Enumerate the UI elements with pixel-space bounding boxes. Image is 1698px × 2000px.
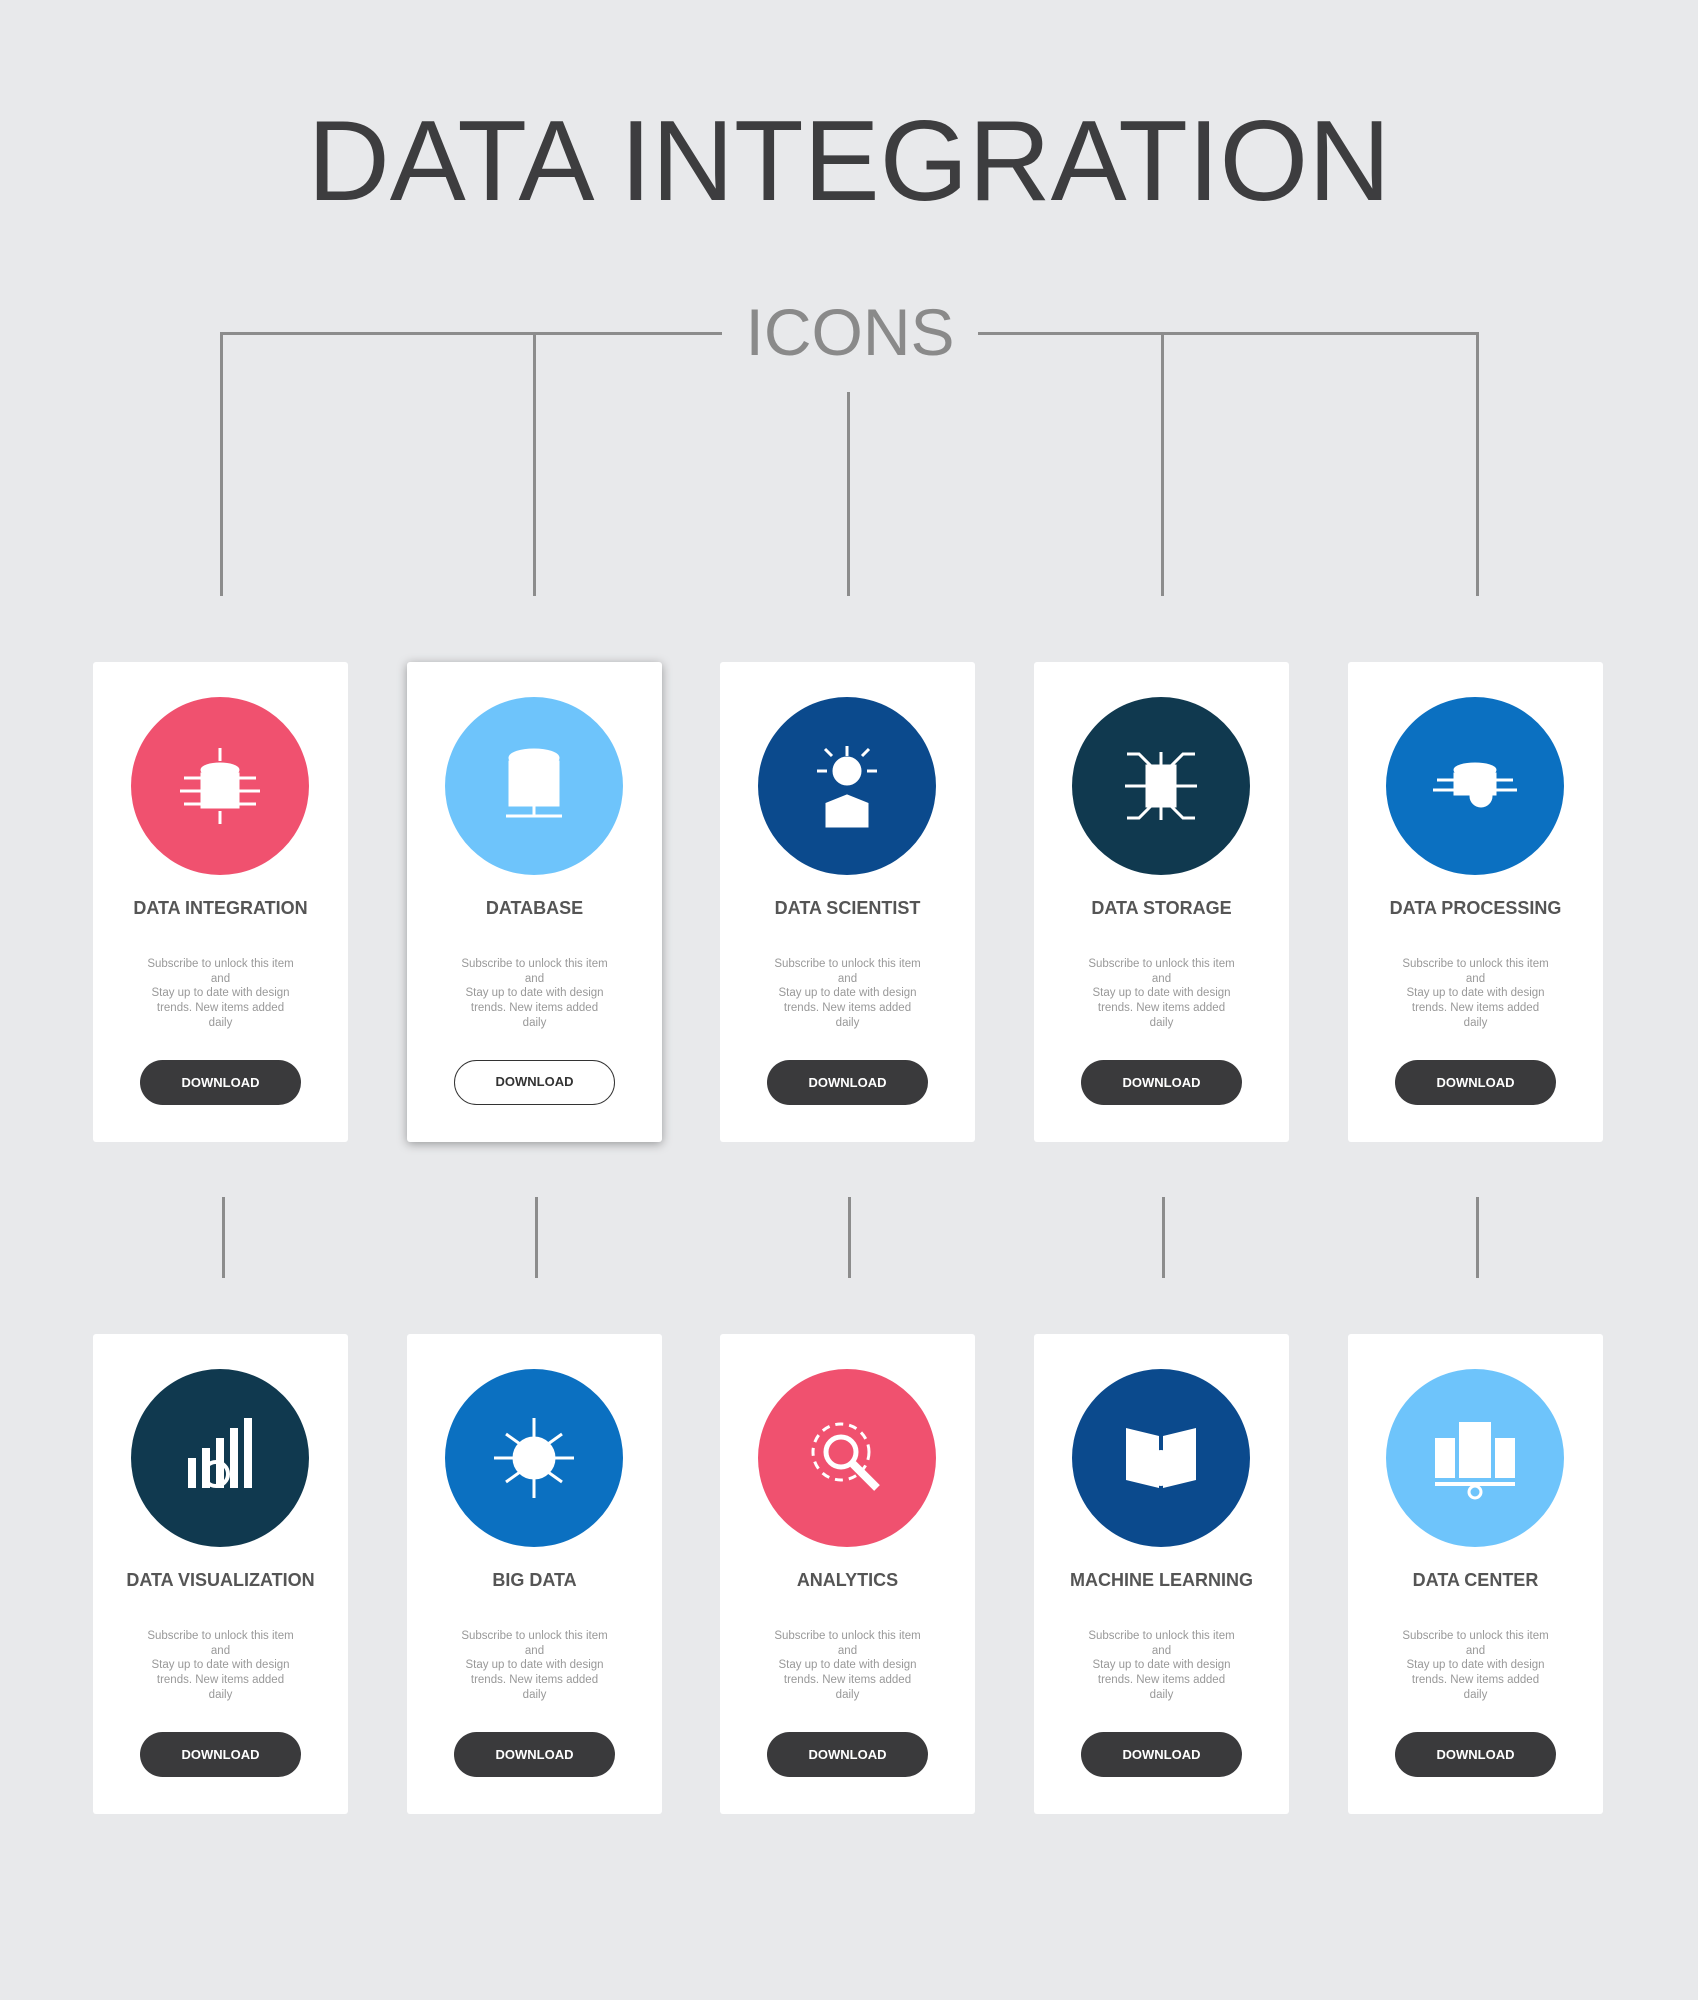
card: data center: Subscribe to unlock this item and: [1402, 1630, 1549, 1657]
card: machine learning: DOWNLOAD: [1122, 1747, 1200, 1762]
card: big data: Subscribe to unlock this item and: [461, 1630, 608, 1657]
card: database: [407, 662, 662, 1142]
icon: magnifier: [758, 1369, 936, 1547]
card: database: Stay up to date with design trends. New items added daily: [465, 987, 604, 1029]
icon: data scientist: [758, 697, 936, 875]
card: data visualization: [93, 1334, 348, 1814]
card: analytics: [720, 1334, 975, 1814]
card: data storage: Subscribe to unlock this item and: [1088, 958, 1235, 985]
card: data visualization: DOWNLOAD: [182, 1747, 260, 1762]
card: machine learning: Subscribe to unlock this item and: [1088, 1630, 1235, 1657]
icon: database: [445, 697, 623, 875]
card: data scientist: Stay up to date with design trends. New items added daily: [778, 987, 917, 1029]
card: data storage: DOWNLOAD: [1122, 1075, 1200, 1090]
icon: book brain: [1072, 1369, 1250, 1547]
card: big data: [407, 1334, 662, 1814]
card: data center: DOWNLOAD: [1436, 1747, 1514, 1762]
card: big data: BIG DATA: [492, 1570, 577, 1590]
card: data scientist: [720, 662, 975, 1142]
card: data processing: Subscribe to unlock this item and: [1402, 958, 1549, 985]
icon: chart: [131, 1369, 309, 1547]
icon: big data gear: [445, 1369, 623, 1547]
card: machine learning: MACHINE LEARNING: [1070, 1570, 1253, 1590]
card: database: DOWNLOAD: [496, 1074, 574, 1089]
card: data visualization: DATA VISUALIZATION: [126, 1570, 315, 1590]
card: big data: DOWNLOAD: [496, 1747, 574, 1762]
card: data processing: Stay up to date with design trends. New items added daily: [1406, 987, 1545, 1029]
card: big data: Stay up to date with design trends. New items added daily: [465, 1659, 604, 1701]
icon: data processing: [1386, 697, 1564, 875]
card: data scientist: DATA SCIENTIST: [775, 898, 920, 918]
title: DATA INTEGRATION: [307, 98, 1391, 225]
card: data integration: DATA INTEGRATION: [133, 898, 308, 918]
card: data integration: Stay up to date with design trends. New items added daily: [151, 987, 290, 1029]
card: data processing: [1348, 662, 1603, 1142]
card: data center: Stay up to date with design trends. New items added daily: [1406, 1659, 1545, 1701]
card: data scientist: Subscribe to unlock this item and: [774, 958, 921, 985]
card: database: DATABASE: [486, 898, 583, 918]
card: data storage: [1034, 662, 1289, 1142]
card: data processing: DOWNLOAD: [1436, 1075, 1514, 1090]
card: analytics: Stay up to date with design trends. New items added daily: [778, 1659, 917, 1701]
card: data integration: [93, 662, 348, 1142]
card: analytics: ANALYTICS: [797, 1570, 898, 1590]
card: data integration: DOWNLOAD: [182, 1075, 260, 1090]
card: data visualization: Stay up to date with design trends. New items added daily: [151, 1659, 290, 1701]
card: machine learning: [1034, 1334, 1289, 1814]
icon: database network: [131, 697, 309, 875]
subtitle: icons: ICONS: [745, 295, 955, 369]
card: data visualization: Subscribe to unlock this item and: [147, 1630, 294, 1657]
card: data scientist: DOWNLOAD: [808, 1075, 886, 1090]
card: database: Subscribe to unlock this item and: [461, 958, 608, 985]
card: data center: DATA CENTER: [1413, 1570, 1538, 1590]
card: data processing: DATA PROCESSING: [1390, 898, 1561, 918]
card: analytics: Subscribe to unlock this item and: [774, 1630, 921, 1657]
card: data storage: Stay up to date with design trends. New items added daily: [1092, 987, 1231, 1029]
card: analytics: DOWNLOAD: [808, 1747, 886, 1762]
icon: servers: [1386, 1369, 1564, 1547]
icon: data storage: [1072, 697, 1250, 875]
card: data center: [1348, 1334, 1603, 1814]
card: data integration: Subscribe to unlock this item and: [147, 958, 294, 985]
connector lines: [220, 332, 1479, 1278]
card: data storage: DATA STORAGE: [1091, 898, 1232, 918]
card: machine learning: Stay up to date with design trends. New items added daily: [1092, 1659, 1231, 1701]
